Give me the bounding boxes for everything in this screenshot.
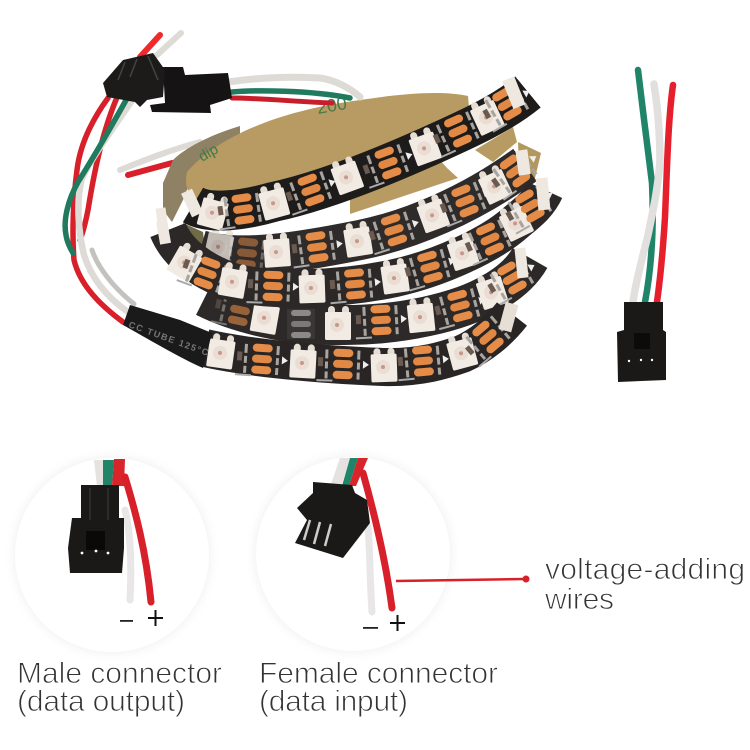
plus sign <box>148 610 163 626</box>
strip coil: second band <box>200 144 547 274</box>
strip coil: third band <box>156 178 562 305</box>
caption: male connector: Male connector <box>17 657 222 690</box>
caption: female connector: (data input) <box>259 685 408 718</box>
callout label: voltage-adding <box>545 553 745 586</box>
panel: male connector circle <box>15 458 209 652</box>
female connector body <box>295 482 370 558</box>
adhesive tape backing: dip <box>196 141 221 165</box>
wires from connector to strip <box>228 77 360 103</box>
joined connector <box>103 53 232 113</box>
male connector body <box>68 485 124 573</box>
white wire <box>633 84 660 302</box>
panel: LED strip with connector <box>65 33 562 383</box>
callout label: wires <box>544 583 614 616</box>
wire stubs above connector <box>140 33 181 57</box>
loose white and red wires <box>120 142 200 175</box>
male wires <box>94 459 151 602</box>
red wire <box>657 85 673 302</box>
strip coil: top band <box>181 76 539 231</box>
caption: male connector: (data output) <box>17 685 185 718</box>
adhesive tape backing <box>163 93 541 252</box>
panel: female connector circle <box>256 457 450 651</box>
connector body <box>617 302 666 382</box>
minus sign <box>363 627 378 629</box>
adhesive tape backing: 200 <box>315 93 348 118</box>
plus sign <box>390 615 405 631</box>
green wire <box>638 70 653 302</box>
callout line: voltage-adding wires <box>396 576 530 582</box>
caption: female connector: Female connector <box>259 657 498 690</box>
panel: single connector with wires <box>617 70 673 382</box>
heat shrink tube: CC TUBE 125°C <box>127 319 210 358</box>
wires on left side <box>65 93 137 322</box>
minus sign <box>120 620 133 622</box>
strip coil: fourth band <box>205 247 544 340</box>
strip coil: bottom band <box>205 302 519 383</box>
heat shrink tube <box>123 305 212 368</box>
female wires <box>331 458 392 612</box>
